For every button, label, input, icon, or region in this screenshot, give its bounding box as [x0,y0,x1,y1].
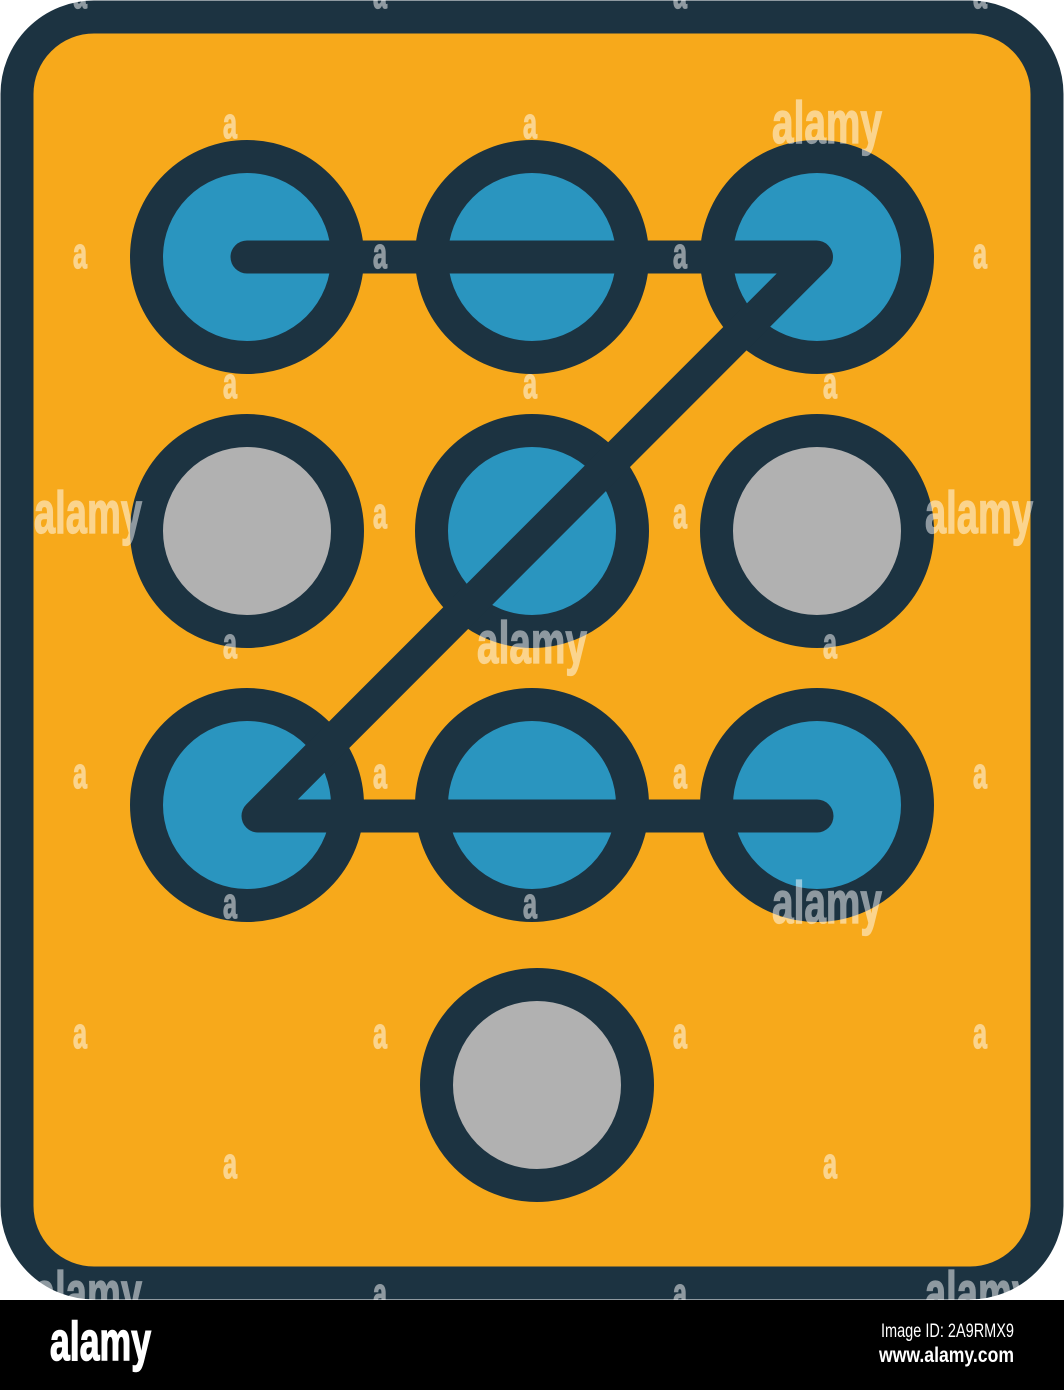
watermark: repeated alamy marks: alamy [772,870,882,936]
watermark: repeated alamy marks: a [373,1269,387,1318]
watermark: repeated alamy marks: alamy [772,90,882,156]
watermark: repeated alamy marks: a [73,1009,87,1058]
watermark: repeated alamy marks: a [523,879,537,928]
watermark: repeated alamy marks: a [223,879,237,928]
watermark: repeated alamy marks: a [373,749,387,798]
watermark: repeated alamy marks: a [223,1139,237,1188]
dot: row 1 column 1 [146,156,348,358]
dot: row 2 column 3 [716,430,918,632]
watermark: repeated alamy marks: a [223,359,237,408]
footer bar [0,1300,1064,1390]
dot: bottom centre [436,984,638,1186]
watermark: repeated alamy marks: alamy [34,480,142,546]
dot: row 1 column 3 [716,156,918,358]
watermark: repeated alamy marks: a [223,99,237,148]
dot: row 3 column 2 [432,704,632,906]
watermark: repeated alamy marks: a [523,359,537,408]
dot: row 3 column 1 [146,704,348,906]
icon: Z-shaped unlock pattern line [247,257,817,816]
watermark: repeated alamy marks: a [973,749,987,798]
dot: row 1 column 2 [432,156,632,358]
footer text: image ID: Image ID: 2A9RMX9 [881,1321,1014,1342]
watermark: repeated alamy marks: a [673,1269,687,1318]
dot: row 2 column 1 [146,430,348,632]
watermark: repeated alamy marks: a [973,229,987,278]
watermark: repeated alamy marks: a [673,1009,687,1058]
dot: row 2 column 2 [432,430,632,632]
watermark: repeated alamy marks: a [823,1139,837,1188]
watermark: repeated alamy marks: a [373,229,387,278]
watermark: repeated alamy marks: alamy [34,1260,142,1326]
watermark: repeated alamy marks: a [73,229,87,278]
watermark: repeated alamy marks: a [223,619,237,668]
footer text: website: www.alamy.com [878,1344,1014,1367]
watermark: repeated alamy marks: alamy [477,610,587,676]
footer logo: alamy: alamy [50,1310,151,1372]
watermark: repeated alamy marks: a [973,1009,987,1058]
watermark: repeated alamy marks: a [823,619,837,668]
watermark: repeated alamy marks: a [823,359,837,408]
watermark: repeated alamy marks: a [673,749,687,798]
dot: row 3 column 3 [716,704,918,906]
watermark: repeated alamy marks: a [673,489,687,538]
watermark: repeated alamy marks: a [523,99,537,148]
watermark: repeated alamy marks: a [373,489,387,538]
icon: pattern lock dots [146,156,918,1186]
watermark: repeated alamy marks: a [73,749,87,798]
watermark: repeated alamy marks: a [373,1009,387,1058]
watermark: repeated alamy marks: a [673,229,687,278]
